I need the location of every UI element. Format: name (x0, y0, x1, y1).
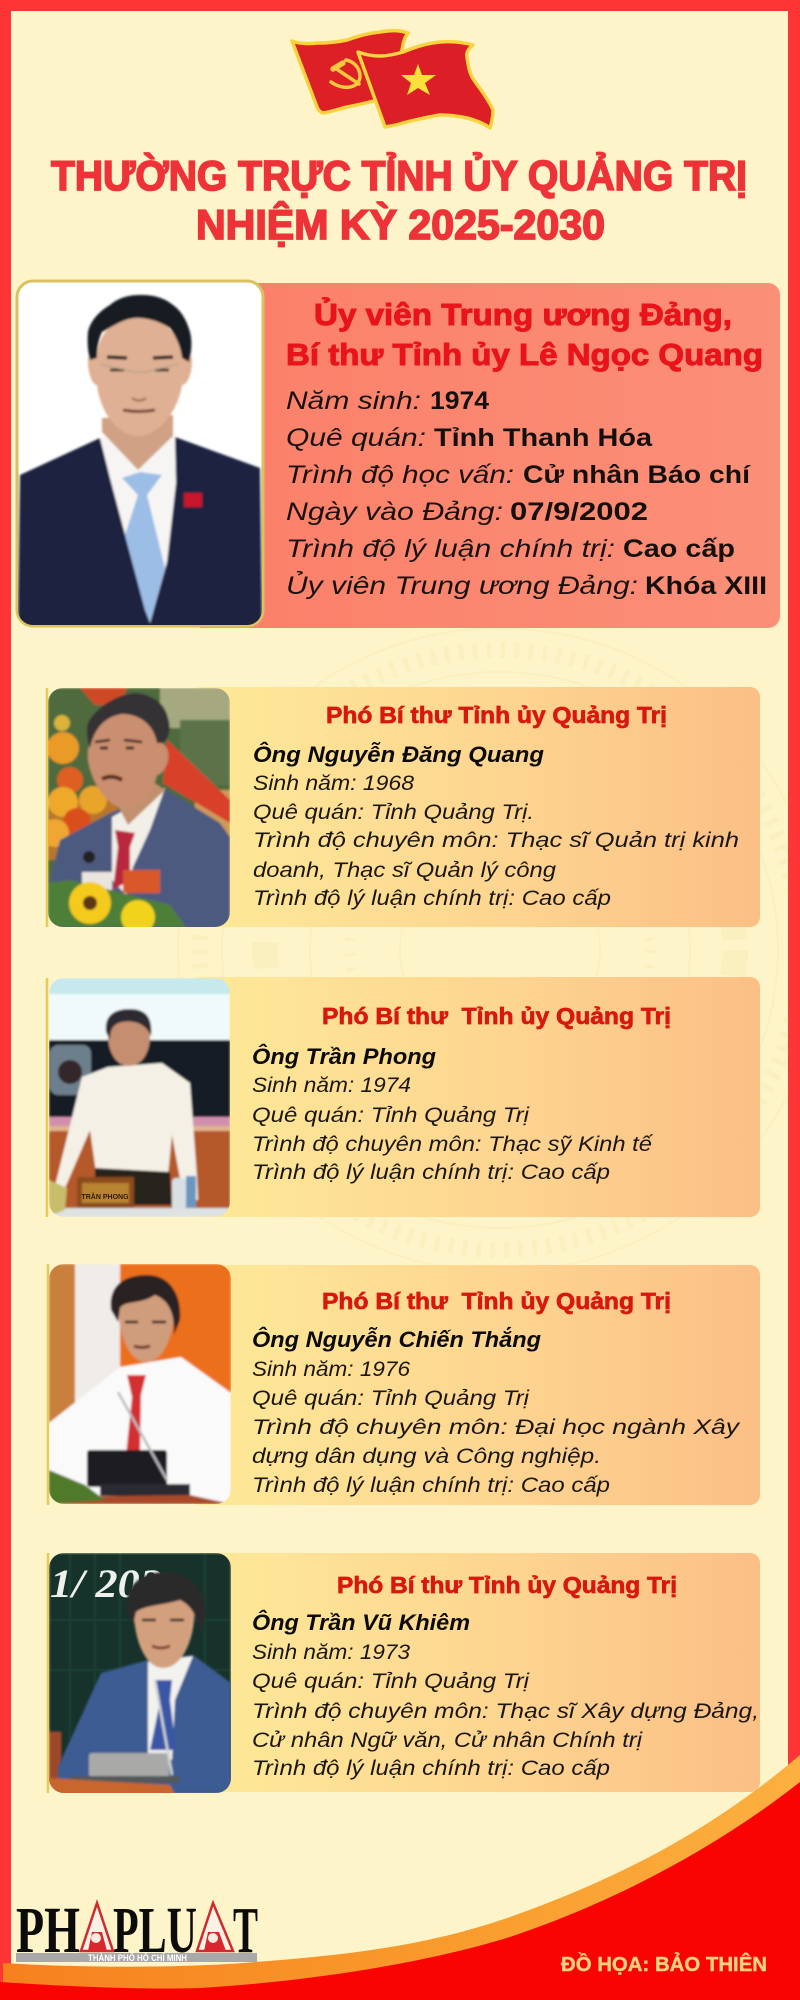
biography rows: Ủy viên Trung ương Đảng: (286, 569, 638, 600)
name and biography (252, 1327, 741, 1497)
panel heading: Ủy viên Trung ương Đảng, (314, 296, 732, 332)
national flag (358, 42, 493, 128)
name and biography: Trình độ chuyên môn: Thạc sĩ Quản trị kinh (253, 828, 739, 852)
name and biography: dựng dân dụng và Công nghiệp. (252, 1444, 601, 1468)
card heading: Phó Bí thư Tỉnh ủy Quảng Trị (337, 1572, 677, 1598)
photo: Nguyễn Chiến Thắng (49, 1264, 231, 1504)
panel: Trần Vũ Khiêm (48, 1553, 760, 1795)
biography rows: Năm sinh: (286, 387, 421, 415)
biography rows: Cao cấp (623, 535, 735, 563)
name and biography (252, 1044, 654, 1184)
name and biography: Trình độ lý luận chính trị: Cao cấp (252, 1756, 610, 1780)
panel heading: Bí thư Tỉnh ủy Lê Ngọc Quang (286, 337, 763, 372)
star (401, 64, 436, 95)
panel heading (286, 296, 763, 372)
card background (48, 1553, 760, 1793)
credit: ĐỒ HỌA: BẢO THIÊN (561, 1952, 767, 1976)
name and biography: Ông Nguyễn Đăng Quang (253, 742, 545, 767)
panel background (190, 283, 780, 628)
title (51, 151, 747, 248)
photo: Nguyễn Đăng Quang (41, 688, 230, 934)
name and biography: Ông Trần Vũ Khiêm (252, 1610, 470, 1635)
name and biography: Trình độ lý luận chính trị: Cao cấp (253, 886, 611, 910)
name and biography: Trình độ chuyên môn: Thạc sỹ Kinh tế (252, 1132, 654, 1156)
panel: Trần Phong (47, 977, 760, 1217)
name and biography: Trình độ chuyên môn: Thạc sĩ Xây dựng Đảng, (252, 1699, 759, 1723)
party flag (292, 31, 408, 113)
title: NHIỆM KỲ 2025-2030 (196, 200, 605, 248)
card background (48, 1264, 760, 1505)
name and biography: doanh, Thạc sĩ Quản lý công (253, 858, 556, 882)
name and biography: Ông Trần Phong (252, 1044, 437, 1069)
name and biography: Quê quán: Tỉnh Quảng Trị (252, 1669, 530, 1693)
biography rows: Ngày vào Đảng: (286, 498, 503, 526)
name plaque: TRẦN PHONG (81, 1191, 129, 1201)
backdrop year: 1/ 202 (50, 1561, 162, 1606)
card heading: Phó Bí thư Tỉnh ủy Quảng Trị (322, 1288, 671, 1314)
name and biography: Trình độ lý luận chính trị: Cao cấp (252, 1473, 610, 1497)
biography rows: Trình độ học vấn: (286, 461, 514, 489)
logo letter A marks (81, 1903, 233, 1951)
logo subtitle: THÀNH PHỐ HỒ CHÍ MINH (88, 1952, 187, 1963)
card background (47, 687, 760, 927)
name and biography: Quê quán: Tỉnh Quảng Trị (252, 1386, 530, 1410)
name and biography: Trình độ chuyên môn: Đại học ngành Xây (252, 1415, 741, 1439)
biography rows: Quê quán: (286, 424, 426, 452)
name and biography: Sinh năm: 1976 (252, 1357, 410, 1381)
name and biography: Ông Nguyễn Chiến Thắng (252, 1327, 542, 1352)
name and biography: Trình độ lý luận chính trị: Cao cấp (252, 1160, 610, 1184)
card heading: Phó Bí thư Tỉnh ủy Quảng Trị (326, 702, 667, 728)
title: THƯỜNG TRỰC TỈNH ỦY QUẢNG TRỊ (51, 151, 747, 199)
logo wordmark: PH (16, 1894, 80, 1967)
name and biography (253, 742, 739, 910)
icon: party and national flags (292, 31, 493, 128)
biography rows: 1974 (430, 387, 489, 415)
biography rows: Tỉnh Thanh Hóa (434, 424, 653, 452)
panel: Nguyễn Chiến Thắng (48, 1264, 760, 1505)
photo: Trần Vũ Khiêm (49, 1553, 231, 1795)
background drum pattern (178, 628, 800, 1272)
hammer and sickle (331, 60, 360, 87)
logo bar (16, 1953, 257, 1962)
biography rows: Cử nhân Báo chí (523, 461, 751, 489)
name and biography: Sinh năm: 1973 (252, 1640, 410, 1664)
card heading: Phó Bí thư Tỉnh ủy Quảng Trị (322, 1003, 671, 1029)
panel: secretary Lê Ngọc Quang (17, 281, 780, 630)
biography rows: Khóa XIII (645, 572, 767, 600)
footer curved band (0, 1755, 800, 2000)
name and biography: Sinh năm: 1974 (252, 1073, 411, 1097)
biography rows: Trình độ lý luận chính trị: (286, 535, 615, 563)
logo: Pháp Luật (16, 1894, 258, 1967)
photo: Lê Ngọc Quang (17, 281, 263, 630)
name and biography: Quê quán: Tỉnh Quảng Trị. (253, 800, 534, 824)
logo wordmark: T (233, 1894, 258, 1967)
name and biography: Sinh năm: 1968 (253, 771, 414, 795)
name and biography: Cử nhân Ngữ văn, Cử nhân Chính trị (252, 1728, 643, 1752)
name and biography: Quê quán: Tỉnh Quảng Trị (252, 1103, 530, 1127)
panel: Nguyễn Đăng Quang (41, 687, 760, 934)
photo: Trần Phong (49, 978, 230, 1217)
biography rows: 07/9/2002 (510, 498, 648, 526)
card background (47, 977, 760, 1217)
biography rows (286, 387, 767, 600)
name and biography (252, 1610, 759, 1780)
logo wordmark: PLU (113, 1894, 197, 1967)
